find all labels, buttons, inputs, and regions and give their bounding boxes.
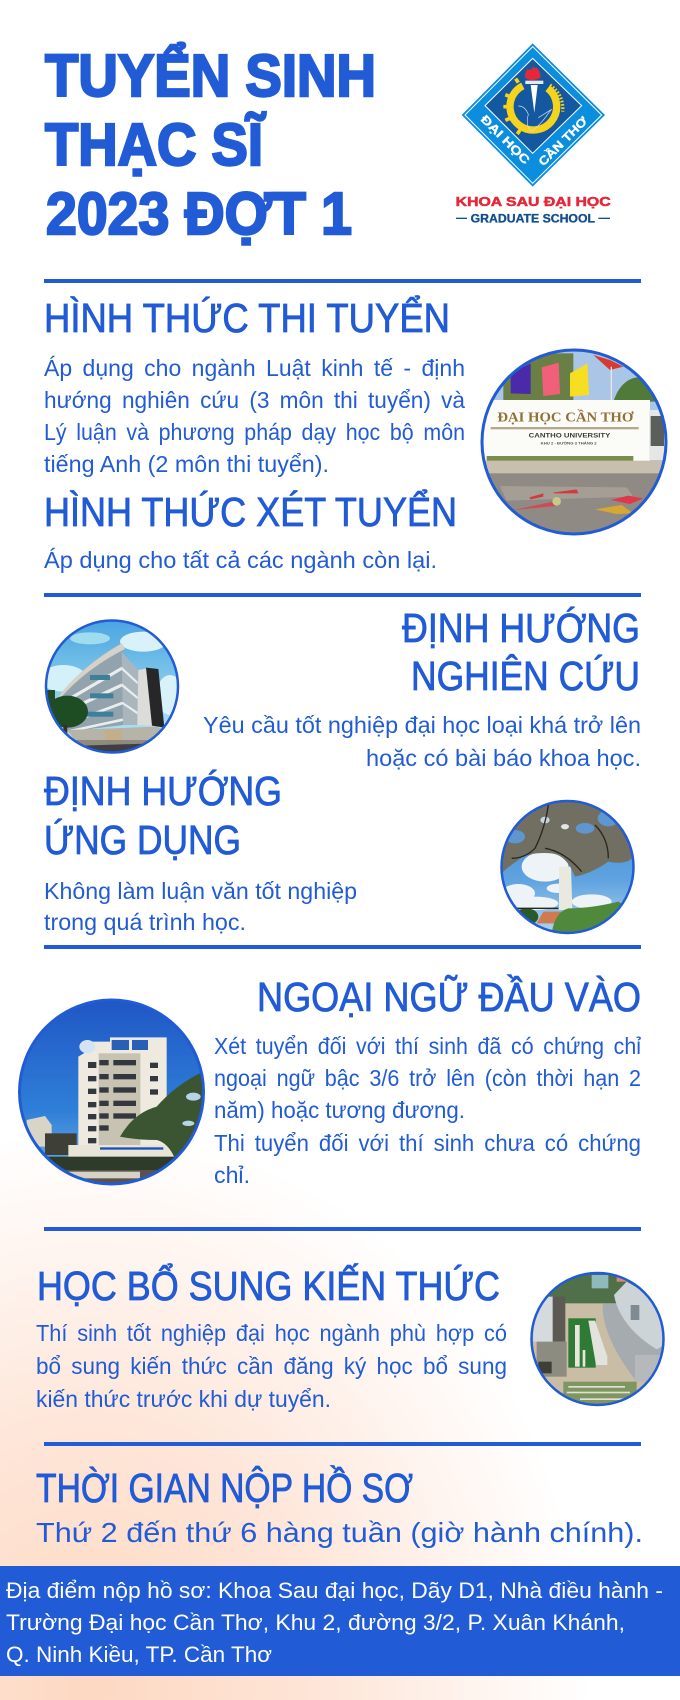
- text: applied requirement: Không làm luận văn tốt nghiệp: [44, 878, 357, 904]
- text: submission days: Thứ 2 đến thứ 6 hàng tuần (giờ hành chính).: [36, 1517, 643, 1548]
- logo: Can Tho University graduate school: KHOA SAU ĐẠI HỌC: [456, 195, 611, 209]
- photo: university gate: CANTHO UNIVERSITY: [529, 432, 611, 439]
- heading: applied orientation: [44, 768, 282, 863]
- text: research requirement: Yêu cầu tốt nghiệp đại học loại khá trở lên: [203, 712, 641, 738]
- title: THẠC SĨ: [45, 112, 266, 178]
- text: exam admission description: hướng nghiên cứu (3 môn thi tuyển) và: [44, 387, 465, 413]
- title: [45, 43, 376, 247]
- heading: applied orientation: ĐỊNH HƯỚNG: [44, 768, 282, 814]
- text: applied requirement: [44, 878, 357, 935]
- logo: Can Tho University graduate school: CẦN THƠ: [535, 113, 591, 169]
- title: TUYỂN SINH: [45, 43, 376, 109]
- photo: tower and tree: [498, 798, 635, 935]
- text: foreign language requirement: [214, 1033, 641, 1188]
- photo: campus aerial view: [530, 1272, 665, 1407]
- photo: modern glass building: [40, 618, 183, 755]
- text: review admission description: Áp dụng cho tất cả các ngành còn lại.: [44, 547, 437, 573]
- heading: research orientation: NGHIÊN CỨU: [411, 653, 640, 699]
- logo: Can Tho University graduate school: ĐẠI HỌC: [478, 112, 533, 167]
- text: foreign language requirement: năm) hoặc tương đương.: [214, 1097, 465, 1123]
- text: supplementary description: kiến thức trước khi dự tuyển.: [36, 1386, 331, 1412]
- text: submission address: [6, 1578, 663, 1667]
- logo: Can Tho University graduate school: GRADUATE SCHOOL: [471, 213, 595, 226]
- text: submission address: Địa điểm nộp hồ sơ: Khoa Sau đại học, Dãy D1, Nhà điều hành -: [6, 1578, 663, 1603]
- heading: exam admission: HÌNH THỨC THI TUYỂN: [44, 294, 450, 341]
- text: submission address: Q. Ninh Kiều, TP. Cần Thơ: [6, 1642, 272, 1667]
- photo: university gate: ĐẠI HỌC CẦN THƠ: [497, 409, 634, 426]
- text: applied requirement: trong quá trình học.: [44, 909, 246, 935]
- panel: exam format: [44, 294, 673, 573]
- heading: applied orientation: ỨNG DỤNG: [44, 817, 241, 863]
- panel: foreign language: [17, 974, 641, 1188]
- text: exam admission description: tiếng Anh (2 môn thi tuyển).: [44, 451, 329, 477]
- text: supplementary description: Thí sinh tốt nghiệp đại học ngành phù hợp có: [36, 1320, 507, 1346]
- heading: research orientation: ĐỊNH HƯỚNG: [402, 605, 640, 651]
- photo: university gate: [480, 348, 668, 536]
- text: supplementary description: [36, 1320, 507, 1412]
- text: exam admission description: Lý luận và phương pháp dạy học bộ môn: [44, 419, 465, 445]
- text: exam admission description: Áp dụng cho ngành Luật kinh tế - định: [44, 355, 465, 381]
- text: research requirement: [203, 712, 641, 771]
- photo: university gate: KHU 2 - ĐƯỜNG 3 THÁNG 2: [541, 440, 597, 445]
- panel: research orientation: [40, 605, 641, 771]
- heading: supplementary knowledge: HỌC BỔ SUNG KIẾN THỨC: [37, 1262, 500, 1309]
- text: research requirement: hoặc có bài báo khoa học.: [366, 745, 641, 771]
- title: 2023 ĐỢT 1: [46, 181, 352, 247]
- heading: foreign language: NGOẠI NGỮ ĐẦU VÀO: [257, 974, 641, 1020]
- heading: submission time: THỜI GIAN NỘP HỒ SƠ: [36, 1465, 413, 1511]
- photo: white tower building: [17, 997, 207, 1187]
- panel: applied orientation: [44, 768, 635, 935]
- panel: submission location band: [0, 1566, 680, 1676]
- panel: submission time: [36, 1465, 643, 1548]
- text: foreign language requirement: Xét tuyển đối với thí sinh đã có chứng chỉ: [214, 1033, 641, 1059]
- text: foreign language requirement: ngoại ngữ bậc 3/6 trở lên (còn thời hạn 2: [214, 1065, 641, 1091]
- panel: supplementary knowledge: [36, 1262, 665, 1412]
- text: exam admission description: [44, 355, 465, 477]
- logo: Can Tho University graduate school: [456, 43, 611, 226]
- text: supplementary description: bổ sung kiến thức cần đăng ký học bổ sung: [36, 1353, 507, 1379]
- text: foreign language requirement: chỉ.: [214, 1162, 250, 1188]
- text: submission address: Trường Đại học Cần Thơ, Khu 2, đường 3/2, P. Xuân Khánh,: [6, 1610, 625, 1635]
- heading: review admission: HÌNH THỨC XÉT TUYỂN: [44, 488, 457, 535]
- text: foreign language requirement: Thi tuyển đối với thí sinh chưa có chứng: [214, 1130, 641, 1156]
- heading: research orientation: [402, 605, 640, 699]
